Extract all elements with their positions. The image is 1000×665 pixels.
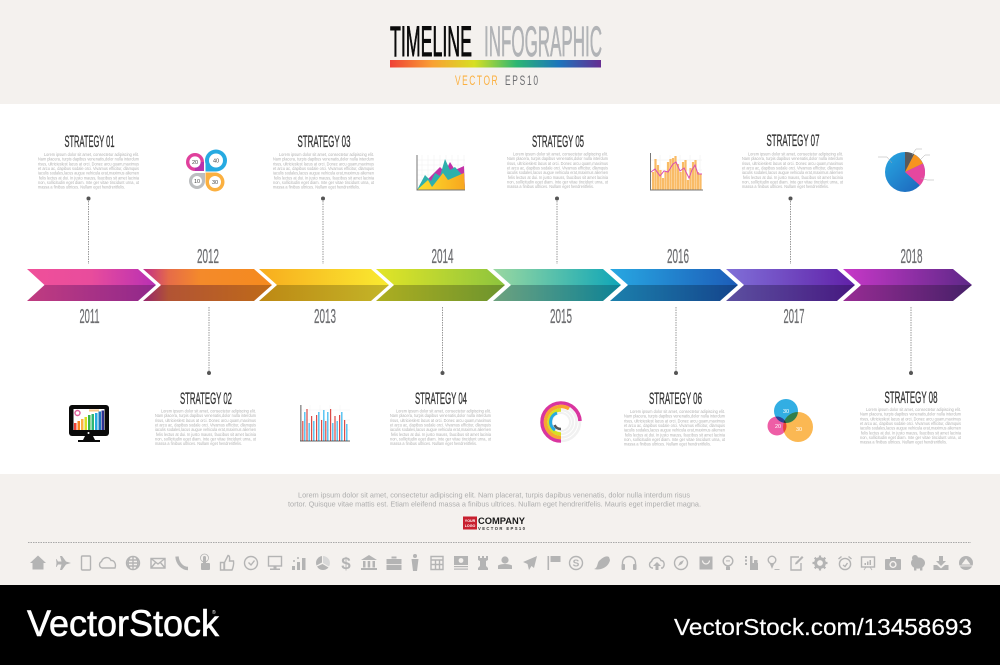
- icon: tapping hand: [745, 556, 758, 570]
- body text: [742, 152, 844, 189]
- body text: felis lectus at dui. In justo mauss, faucibus sit amet lacinia: [625, 432, 725, 437]
- body text: felis lectus at dui. In justo mauss, faucibus sit amet lacinia: [156, 432, 256, 437]
- year labels: 2013: [314, 306, 336, 328]
- segment 2015: [493, 269, 621, 301]
- body text: massa a finibus ultrices. Nullam eget hendreritfelis.: [507, 184, 594, 189]
- body text: non, sollicitudin eget diam. Inte ger vitae tincidunt urna, ut: [273, 180, 375, 185]
- text: INFOGRAPHIC: [484, 18, 602, 66]
- body text: massa a finibus ultrices. Nullam eget hendreritfelis.: [860, 440, 947, 445]
- year labels: 2012: [197, 246, 219, 268]
- icon: phone: [177, 556, 188, 568]
- panel: strategy 03: STRATEGY 03: [298, 132, 350, 151]
- icon: dollar: $: [341, 554, 351, 573]
- icon: download: [934, 556, 948, 570]
- body text: Nam placera, turpis dapibus venenatis,dolor nulla interdum: [155, 413, 256, 418]
- body text: [155, 408, 257, 446]
- body text: et arcu ac, dapibus sodale orci. Vivamus efficitur, dlamquis: [624, 423, 726, 428]
- body text: massa a finibus ultrices. Nullam eget hendreritfelis.: [742, 184, 829, 189]
- segment 2014: [376, 269, 505, 301]
- body text: non, sollicitudin eget diam. Inte ger vitae tincidunt urna, ut: [38, 180, 140, 185]
- body text: risus, ultricieslest lacus at orci. Donec arcu quam,maximus: [624, 418, 726, 423]
- body text: massa a finibus ultrices. Nullam eget hendreritfelis.: [38, 185, 125, 190]
- panel: strategy 06: STRATEGY 06: [649, 389, 702, 408]
- body text: Nam placera, turpis dapibus venenatis,dolor nulla interdum: [390, 413, 491, 418]
- icon: mail: [151, 558, 165, 568]
- body text: Nam placera, turpis dapibus venenatis,dolor nulla interdum: [860, 412, 961, 417]
- body text: iaculis sodales,lacus augue vehicula erat,maximus aliemen: [273, 171, 374, 176]
- year labels: [80, 246, 922, 328]
- icon: note edit: [791, 556, 804, 570]
- icon: headphones: [622, 556, 636, 570]
- panel: strategy 03: [273, 132, 375, 190]
- company logo: VECTOR EPS10: [478, 526, 526, 531]
- icon: pie chart: [878, 149, 934, 192]
- icon: globe: [126, 556, 140, 570]
- panel: strategy 05: STRATEGY 05: [532, 132, 584, 151]
- rainbow bar: [390, 60, 601, 68]
- body text: felis lectus at dui. In justo mauss, faucibus sit amet lacinia: [274, 175, 374, 180]
- body text: risus, ultricieslest lacus at orci. Donec arcu quam,maximus: [742, 161, 844, 166]
- year labels: 2016: [667, 246, 689, 268]
- connectors: [86, 196, 913, 375]
- year labels: 2014: [432, 246, 454, 268]
- icon: briefcase: [386, 556, 402, 570]
- icon: flag: [548, 556, 560, 570]
- subtitle: VECTOR: [455, 74, 498, 89]
- body text: Nam placera, turpis dapibus venenatis,dolor nulla interdum: [624, 414, 725, 419]
- panel: strategy 07: [742, 131, 844, 189]
- body text: risus, ultricieslest lacus at orci. Donec arcu quam,maximus: [390, 418, 492, 423]
- icon row: [30, 554, 973, 573]
- connector 4: [440, 307, 444, 375]
- icon: hand pointer: [200, 554, 210, 570]
- icon: area chart: [417, 155, 465, 190]
- connector 1: [86, 196, 90, 264]
- body text: Lorem ipsum dolor sit amet, consectetur adipiscing elit.: [161, 408, 256, 414]
- body text: et arcu ac, dapibus sodale orci. Vivamus efficitur, dlamquis: [742, 165, 844, 170]
- icon: grouped bar chart: [300, 405, 350, 441]
- body text: non, sollicitudin eget diam. Inte ger vitae tincidunt urna, ut: [390, 436, 492, 441]
- icon: four-petal percent chart: 10: [194, 179, 200, 185]
- header band: [0, 0, 1000, 104]
- icon: presentation board: [862, 557, 874, 570]
- icon: user bust: [498, 556, 512, 569]
- timeline arrow: [27, 269, 972, 301]
- icon: desktop: [268, 556, 282, 570]
- body text: et arcu ac, dapibus sodale orci. Vivamus efficitur, dlamquis: [390, 422, 492, 427]
- subtitle: EPS10: [505, 74, 538, 89]
- icon: four-petal percent chart: 20: [192, 160, 198, 166]
- segment 2011: [27, 269, 156, 301]
- body text: [390, 408, 492, 446]
- icon: rook: [478, 556, 488, 570]
- icon: banknote stack: [454, 556, 468, 570]
- body text: iaculis sodales,lacus augue vehicula erat,maximus aliemen: [860, 426, 961, 431]
- footer band: [0, 474, 1000, 585]
- segment 2013: [259, 269, 389, 301]
- body text: felis lectus at dui. In justo mauss, faucibus sit amet lacinia: [861, 430, 961, 435]
- body text: risus, ultricieslest lacus at orci. Donec arcu quam,maximus: [273, 161, 375, 166]
- icon: coin: [570, 556, 582, 570]
- body text: risus, ultricieslest lacus at orci. Donec arcu quam,maximus: [38, 161, 140, 166]
- icon: plane: [56, 556, 71, 570]
- panel: strategy 08: [860, 388, 962, 445]
- icon: coin: S: [573, 558, 580, 570]
- year labels: 2011: [80, 306, 100, 328]
- text: 2018: [900, 246, 922, 268]
- icon: four-petal percent chart: 40: [213, 158, 219, 164]
- connector 5: [555, 196, 559, 264]
- company logo: COMPANY: [478, 516, 526, 527]
- body text: Lorem ipsum dolor sit amet, consectetur adipiscing elit.: [748, 152, 843, 156]
- panel: strategy 02: [155, 389, 257, 446]
- panel: strategy 02: STRATEGY 02: [180, 389, 232, 408]
- body text: risus, ultricieslest lacus at orci. Donec arcu quam,maximus: [507, 161, 609, 166]
- body text: massa a finibus ultrices. Nullam eget hendreritfelis.: [155, 441, 242, 446]
- body text: felis lectus at dui. In justo mauss, faucibus sit amet lacinia: [39, 175, 139, 180]
- body text: [860, 407, 962, 445]
- dashed divider: [28, 542, 971, 544]
- body text: non, sollicitudin eget diam. Inte ger vitae tincidunt urna, ut: [507, 179, 609, 184]
- connector 8: [909, 307, 913, 375]
- body text: iaculis sodales,lacus augue vehicula erat,maximus aliemen: [38, 171, 139, 176]
- body text: Nam placera, turpis dapibus venenatis,dolor nulla interdum: [38, 157, 139, 162]
- watermark bar: [0, 585, 1000, 665]
- icon: cloud upload: [650, 558, 664, 570]
- panel: strategy 08: STRATEGY 08: [884, 388, 938, 407]
- body text: iaculis sodales,lacus augue vehicula erat,maximus aliemen: [624, 428, 725, 433]
- body text: felis lectus at dui. In justo mauss, faucibus sit amet lacinia: [508, 175, 608, 180]
- connector 2: [207, 307, 211, 375]
- body text: iaculis sodales,lacus augue vehicula erat,maximus aliemen: [155, 427, 256, 432]
- company logo: YOUR: [465, 519, 476, 523]
- panel: strategy 04: [390, 389, 492, 446]
- body text: et arcu ac, dapibus sodale orci. Vivamus efficitur, dlamquis: [38, 166, 140, 171]
- body text: massa a finibus ultrices. Nullam eget hendreritfelis.: [624, 442, 711, 447]
- body text: Lorem ipsum dolor sit amet, consectetur adipiscing elit.: [44, 152, 139, 157]
- icon: person: [412, 554, 418, 571]
- watermark logo: ®: [212, 609, 216, 616]
- icon: paper plane: [523, 556, 537, 570]
- footer text: [288, 490, 701, 508]
- connector 3: [321, 196, 325, 264]
- body text: [273, 152, 375, 190]
- segment 2017: [726, 269, 855, 301]
- body text: iaculis sodales,lacus augue vehicula erat,maximus aliemen: [390, 427, 491, 432]
- body text: Nam placera, turpis dapibus venenatis,dolor nulla interdum: [273, 157, 374, 162]
- company logo: [463, 516, 526, 531]
- body text: risus, ultricieslest lacus at orci. Donec arcu quam,maximus: [155, 418, 257, 423]
- title: TIMELINE: [390, 18, 472, 66]
- icon: four-petal percent chart: 30: [212, 180, 218, 186]
- panel: strategy 01: [38, 132, 140, 190]
- icon: monitor: [69, 405, 109, 442]
- segment 2012: [143, 269, 272, 301]
- panel: strategy 06: [624, 389, 726, 447]
- body text: et arcu ac, dapibus sodale orci. Vivamus efficitur, dlamquis: [273, 166, 375, 171]
- icon: gear: [812, 556, 828, 570]
- body text: [507, 152, 609, 189]
- icon: venn diagram: 20: [775, 424, 781, 430]
- icon: four-petal percent chart: [186, 150, 227, 192]
- segment 2018: [843, 269, 972, 301]
- body text: non, sollicitudin eget diam. Inte ger vitae tincidunt urna, ut: [624, 437, 726, 442]
- body text: et arcu ac, dapibus sodale orci. Vivamus efficitur, dlamquis: [860, 421, 962, 426]
- year labels: 2015: [550, 306, 572, 328]
- icon: bar and line chart: [650, 153, 703, 190]
- icon: bird: [594, 556, 610, 569]
- icon: venn diagram: 30: [783, 409, 789, 415]
- body text: [38, 152, 140, 190]
- body text: [624, 409, 726, 447]
- body text: massa a finibus ultrices. Nullam eget hendreritfelis.: [273, 185, 360, 190]
- company logo: LOGO: [465, 524, 475, 528]
- icon: dome badge: [959, 556, 973, 570]
- body text: felis lectus at dui. In justo mauss, faucibus sit amet lacinia: [391, 432, 491, 437]
- body text: Lorem ipsum dolor sit amet, consectetur adipiscing elit.: [396, 408, 491, 414]
- body text: non, sollicitudin eget diam. Inte ger vitae tincidunt urna, ut: [860, 435, 962, 440]
- icon: venn diagram: [768, 399, 813, 442]
- watermark logo: VectorStock: [27, 603, 219, 644]
- icon: thumbs up: [220, 556, 234, 570]
- panel: strategy 07: STRATEGY 07: [766, 131, 820, 150]
- icon: house: [30, 556, 46, 570]
- body text: felis lectus at dui. In justo mauss, faucibus sit amet lacinia: [743, 175, 843, 180]
- watermark url: VectorStock.com/13458693: [674, 614, 972, 640]
- body text: Nam placera, turpis dapibus venenatis,dolor nulla interdum: [742, 156, 843, 161]
- icon: pie: [316, 556, 330, 570]
- connector 7: [788, 196, 792, 264]
- body text: et arcu ac, dapibus sodale orci. Vivamus efficitur, dlamquis: [507, 165, 609, 170]
- subtitle: [455, 74, 538, 89]
- body text: Lorem ipsum dolor sit amet, consectetur adipiscing elit.: [279, 152, 374, 157]
- icon: bank: [361, 555, 377, 570]
- body text: iaculis sodales,lacus augue vehicula erat,maximus aliemen: [742, 170, 843, 175]
- body text: Lorem ipsum dolor sit amet, consectetur adipiscing elit.: [630, 409, 725, 414]
- icon: radial chart: [542, 403, 580, 441]
- body text: iaculis sodales,lacus augue vehicula erat,maximus aliemen: [507, 170, 608, 175]
- icon: tablet: [82, 556, 90, 570]
- icon: calculator table: [431, 556, 443, 570]
- icon: piggy bank: [911, 555, 925, 570]
- icon: camera: [885, 557, 901, 570]
- year labels: 2017: [784, 306, 804, 328]
- icon: bulb: [723, 556, 733, 570]
- panel: strategy 05: [507, 132, 609, 189]
- segment 2016: [610, 269, 738, 301]
- body text: et arcu ac, dapibus sodale orci. Vivamus efficitur, dlamquis: [155, 422, 257, 427]
- icon: cloud: [100, 558, 115, 568]
- footer text: tortor. Quisque vitae mattis est. Etiam eleifend massa a finibus ultrices. Nullam eget hendreritfelis. Mauris eget imperdiet magna.: [288, 500, 701, 508]
- icon: clock: [244, 556, 258, 570]
- icon: inbox box: [700, 556, 712, 570]
- connector 6: [674, 307, 678, 375]
- body text: non, sollicitudin eget diam. Inte ger vitae tincidunt urna, ut: [155, 436, 257, 441]
- body text: Lorem ipsum dolor sit amet, consectetur adipiscing elit.: [866, 407, 961, 412]
- body text: Nam placera, turpis dapibus venenatis,dolor nulla interdum: [507, 156, 608, 161]
- icon: compass: [674, 556, 688, 570]
- icon: pen nib: [768, 556, 780, 570]
- icon: venn diagram: 30: [796, 427, 802, 433]
- icon: rising bars: [292, 557, 306, 570]
- body text: non, sollicitudin eget diam. Inte ger vitae tincidunt urna, ut: [742, 179, 844, 184]
- footer text: Lorem ipsum dolor sit amet, consectetur adipiscing elit. Nam placerat, turpis dapibus venenatis, dolor nulla interdum risus: [298, 490, 690, 500]
- panel: strategy 01: STRATEGY 01: [64, 132, 114, 151]
- icon: alarm clock: [838, 556, 852, 570]
- body text: Lorem ipsum dolor sit amet, consectetur adipiscing elit.: [513, 152, 608, 156]
- body text: risus, ultricieslest lacus at orci. Donec arcu quam,maximus: [860, 416, 962, 421]
- panel: strategy 04: STRATEGY 04: [415, 389, 467, 408]
- body text: massa a finibus ultrices. Nullam eget hendreritfelis.: [390, 441, 477, 446]
